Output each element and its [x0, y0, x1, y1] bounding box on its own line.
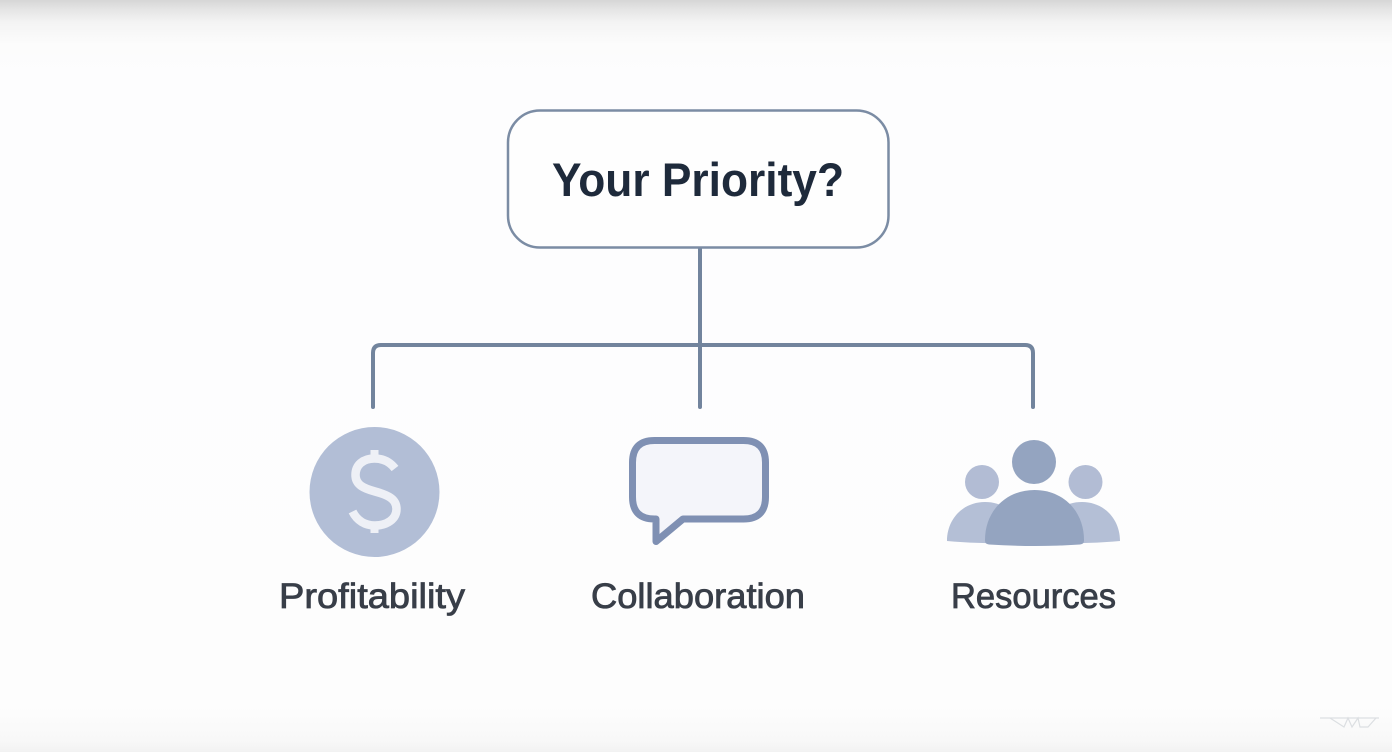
heading: Your Priority? [552, 153, 844, 206]
label: profitability: Profitability [279, 577, 466, 616]
icon: speech bubble [632, 440, 766, 542]
label: resources: Resources [951, 577, 1116, 616]
icon: dollar coin [310, 427, 440, 557]
connector lines [373, 248, 1033, 407]
label: collaboration: Collaboration [591, 577, 805, 616]
watermark [1320, 718, 1379, 727]
priority box [508, 110, 888, 248]
icon: group of people [947, 440, 1120, 546]
